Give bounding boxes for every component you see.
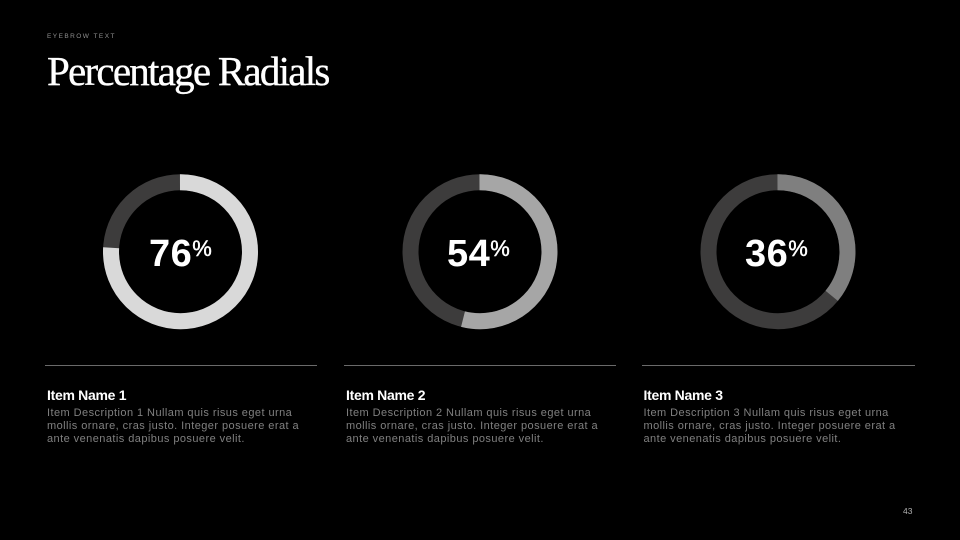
radial chart: 36% [708,182,848,321]
eyebrow text: EYEBROW TEXT [47,33,116,40]
item description 2: Item Description 2 Nullam quis risus eget urna [346,407,591,419]
item name 3: Item Name 3 [644,387,723,403]
title: Percentage Radials [47,48,329,94]
radial chart: 76%: 76 [149,233,192,275]
item description 2: ante venenatis dapibus posuere velit. [346,433,544,445]
item description 2: mollis ornare, cras justo. Integer posuere erat a [346,420,598,432]
item description 2 [346,407,598,445]
item description 1: mollis ornare, cras justo. Integer posuere erat a [47,420,299,432]
item description 3: mollis ornare, cras justo. Integer posuere erat a [644,420,896,432]
item description 1: ante venenatis dapibus posuere velit. [47,433,245,445]
item description 3 [644,407,896,445]
radial chart: 54% [410,182,550,321]
item name 2: Item Name 2 [346,387,425,403]
radial chart: 54%: % [490,236,510,261]
item description 3: Item Description 3 Nullam quis risus eget urna [644,407,889,419]
item description 3: ante venenatis dapibus posuere velit. [644,433,841,445]
item description 1: Item Description 1 Nullam quis risus eget urna [47,407,292,419]
item description 1 [47,407,299,445]
radial chart: 54%: 54 [447,233,490,275]
page number: 43 [903,506,912,516]
radial chart: 76%: % [192,236,212,261]
item name 1: Item Name 1 [47,387,126,403]
radial chart: 36%: % [788,236,808,261]
radial chart: 36%: 36 [745,233,788,275]
radial chart: 76% [111,182,250,321]
